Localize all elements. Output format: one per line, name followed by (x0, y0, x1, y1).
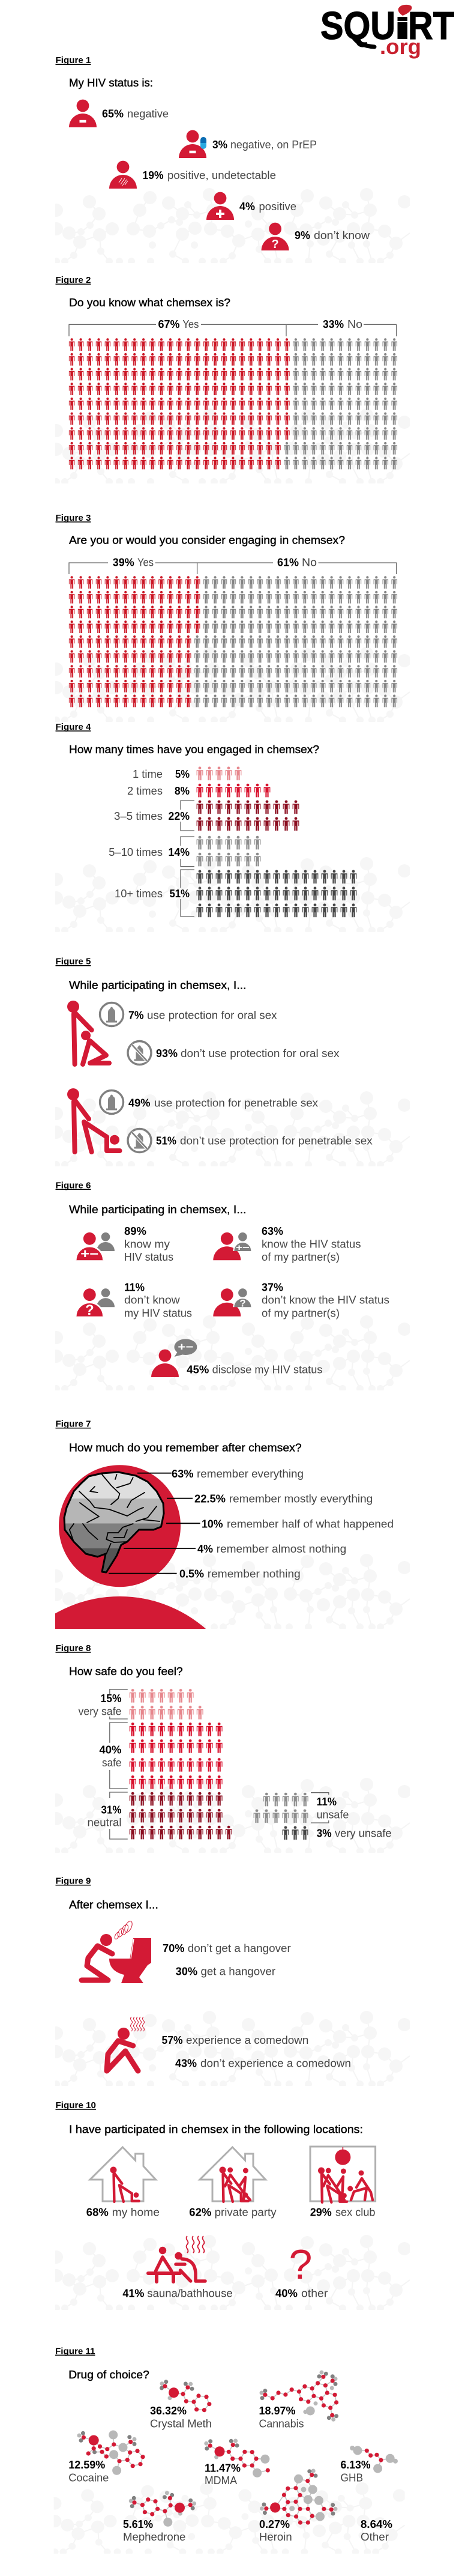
right labels: 3% (317, 1828, 332, 1840)
molecule and label: GHB: GHB (341, 2472, 363, 2484)
icon and label: positive (206, 192, 296, 220)
panel: figure 5 protection (55, 957, 410, 1165)
icon and label: other: 40% (275, 2287, 298, 2299)
molecule and label: crystal meth: 36.32% (150, 2405, 187, 2417)
molecule and label: cannabis (259, 2372, 337, 2430)
panel: figure 2 know chemsex (55, 275, 410, 482)
heading: After chemsex I... (69, 1899, 158, 1911)
icon and label: sex club: 29% (310, 2206, 332, 2218)
icon and label: disclose status: +− (178, 1341, 193, 1353)
row labels: 5–10 times (109, 846, 163, 858)
row labels: 3–5 times (114, 810, 163, 822)
molecule and label: MDMA: 11.47% (205, 2462, 241, 2474)
row labels: 2 times (127, 785, 163, 797)
left labels: neutral (88, 1817, 121, 1829)
icon and label: don't know partner status (213, 1281, 389, 1319)
comedown labels: 57% (162, 2034, 182, 2046)
icon and label: no protection oral (128, 1041, 340, 1064)
molecule and label: cocaine: 12.59% (68, 2459, 105, 2471)
panel: figure 11 drug of choice (55, 2346, 405, 2552)
icon and label: positive undetectable (109, 161, 276, 189)
right labels: unsafe (317, 1808, 349, 1820)
right labels: very unsafe (335, 1828, 392, 1840)
panel: figure 7 memory (55, 1420, 410, 1629)
panel: figure 6 HIV status knowledge (55, 1180, 410, 1389)
icon and label: know partner status: 63% (262, 1225, 283, 1237)
icon and label: don't know: don’t know (314, 229, 370, 241)
bracket and percentages: 67% (158, 318, 180, 330)
icon and label: know my status: know my (124, 1238, 170, 1250)
right labels (317, 1796, 392, 1840)
figure 8 label: Figure 8 (55, 1643, 91, 1653)
pictogram grid 39 yes 61 no (67, 575, 399, 709)
molecule and label: mephedrone: Mephedrone (123, 2531, 185, 2543)
memory labels: remember almost nothing (217, 1543, 346, 1555)
logo: SQUIRT.org: SQU (320, 4, 395, 47)
molecule and label: MDMA (205, 2441, 268, 2487)
icon and label: don't know my status: ? (85, 1302, 94, 1318)
person head circle (59, 1465, 181, 1587)
pictogram grid 67 yes 33 no (67, 338, 399, 471)
molecule and label: heroin: 0.27% (259, 2518, 290, 2530)
logo: SQUIRT.org: RT (408, 4, 454, 47)
molecule and label: heroin (259, 2471, 335, 2543)
molecule and label: mephedrone: 5.61% (123, 2518, 153, 2530)
bracket and percentages: Yes (137, 556, 154, 568)
icon and label: positive: positive (259, 201, 296, 213)
icon and label: positive undetectable: 19% (143, 169, 163, 181)
figure 2 label: Figure 2 (55, 275, 91, 285)
icon and label: don't know: 9% (295, 229, 310, 241)
icon and label: positive: 4% (239, 201, 255, 213)
bracket and percentages: 33% (323, 318, 344, 330)
comedown labels: experience a comedown (186, 2034, 308, 2046)
row labels: 5% (175, 768, 190, 780)
heading: My HIV status is: (69, 77, 153, 89)
figure 10 label: Figure 10 (55, 2100, 96, 2111)
pictogram rows (128, 1688, 310, 1843)
icon and label: private party: 62% (189, 2206, 211, 2218)
heading: While participating in chemsex, I... (69, 1204, 247, 1216)
icon and label: use protection penetrable: use protection for penetrable sex (154, 1097, 318, 1109)
icon and label: my home: 68% (86, 2206, 109, 2218)
icon and label: don't know my status: my HIV status (124, 1307, 192, 1319)
icon and label: know partner status: know the HIV status (262, 1238, 361, 1250)
icon and label: don't know my status: 11% (124, 1281, 145, 1293)
icon and label: no protection penetrable (128, 1129, 373, 1152)
memory labels: 10% (202, 1518, 223, 1530)
row labels: 1 time (133, 768, 163, 780)
icon and label: negative: 65% (102, 108, 124, 120)
icon and label: don't know my status (76, 1281, 192, 1319)
icon and label: other: other (301, 2287, 328, 2299)
bracket and percentages (69, 318, 397, 336)
icon and label: sauna (122, 2236, 233, 2299)
heading: How safe do you feel? (69, 1665, 183, 1677)
bracket and percentages: 61% (277, 556, 299, 568)
icon and label: know my status: HIV status (124, 1251, 173, 1263)
molecule and label: mephedrone (123, 2493, 194, 2543)
row labels: 8% (175, 785, 190, 797)
molecule and label: cocaine (68, 2433, 143, 2484)
molecule and label: cannabis: 18.97% (259, 2405, 295, 2417)
molecule and label: MDMA: MDMA (205, 2474, 237, 2487)
memory labels: 0.5% (179, 1568, 204, 1580)
heading: I have participated in chemsex in the following locations: (69, 2124, 363, 2136)
person body dome (55, 1596, 206, 1629)
memory labels: remember half of what happened (227, 1518, 394, 1530)
label: other drugs (361, 2518, 392, 2543)
figure 4 label: Figure 4 (55, 722, 91, 732)
bracket and percentages: No (347, 318, 362, 330)
icon and label: disclose status: disclose my HIV status (212, 1364, 322, 1376)
bracket and percentages: Yes (182, 318, 199, 330)
icon: penetrative sex figures (67, 1088, 120, 1152)
bracket and percentages: No (302, 556, 317, 568)
icon and label: negative: negative (127, 108, 169, 120)
heading: How much do you remember after chemsex? (69, 1442, 302, 1454)
label: other drugs: Other (361, 2531, 389, 2543)
left labels: safe (102, 1757, 121, 1769)
icon and label: know my status: +− (80, 1246, 98, 1261)
molecule and label: GHB (341, 2448, 395, 2484)
figure 1 label: Figure 1 (55, 55, 91, 65)
icon: oral sex figures (67, 1001, 109, 1064)
molecule and label: crystal meth (150, 2382, 212, 2430)
hangover labels: get a hangover (200, 1965, 275, 1977)
logo: SQUIRT.org (320, 4, 454, 59)
comedown labels: don’t experience a comedown (200, 2058, 351, 2070)
icon and label: don't know partner status: ? (239, 1297, 246, 1309)
icon and label: my home: my home (112, 2206, 160, 2218)
bracket and percentages: 39% (113, 556, 134, 568)
logo: SQUIRT.org: .org (380, 34, 421, 59)
hangover labels: 30% (176, 1965, 197, 1977)
figure 7 label: Figure 7 (55, 1419, 91, 1429)
row labels: 51% (169, 888, 190, 900)
icon and label: other (275, 2241, 328, 2299)
icon and label: other: ? (289, 2241, 312, 2288)
icon and label: know partner status: +− (236, 1243, 250, 1253)
icon and label: no protection oral: 93% (156, 1047, 178, 1059)
figure 5 label: Figure 5 (55, 957, 91, 967)
icon: person comedown (107, 2017, 144, 2071)
icon and label: private party: private party (215, 2206, 277, 2218)
figure 6 label: Figure 6 (55, 1180, 91, 1190)
brackets (181, 801, 194, 917)
panel: figure 9 after chemsex (55, 1876, 410, 2084)
left labels: very safe (78, 1705, 121, 1717)
brackets (110, 1690, 329, 1839)
icon and label: negative on PrEP: 3% (212, 139, 227, 151)
hangover labels (163, 1942, 291, 1977)
leader lines (109, 1473, 200, 1574)
icon and label: sauna: sauna/bathhouse (147, 2287, 233, 2299)
icon and label: positive undetectable: positive, undetectable (167, 169, 276, 181)
icon and label: use protection penetrable: 49% (128, 1097, 150, 1109)
heading: Drug of choice? (68, 2369, 149, 2381)
memory labels: remember everything (197, 1468, 304, 1480)
molecule and label: cocaine: Cocaine (68, 2472, 109, 2484)
figure 3 label: Figure 3 (55, 513, 91, 523)
heading: Do you know what chemsex is? (69, 297, 230, 309)
icon and label: disclose status: 45% (187, 1364, 209, 1376)
icon and label: sex club: sex club (335, 2206, 376, 2218)
icon: brain (64, 1472, 164, 1572)
left labels: 31% (101, 1804, 121, 1816)
icon and label: no protection oral: don’t use protection for oral sex (181, 1047, 340, 1059)
icon and label: private party (189, 2147, 277, 2218)
icon and label: know my status (76, 1225, 173, 1263)
memory labels: 63% (172, 1468, 193, 1480)
icon and label: no protection penetrable: don’t use protection for penetrable sex (180, 1135, 373, 1147)
icon and label: use protection oral: use protection for oral sex (147, 1010, 277, 1022)
icon and label: my home (86, 2147, 160, 2218)
molecule and label: GHB: 6.13% (341, 2459, 371, 2471)
right labels: 11% (317, 1796, 337, 1808)
icon: person at toilet (82, 1920, 151, 1983)
icon and label: don't know partner status: 37% (262, 1281, 283, 1293)
icon and label: negative on PrEP (179, 130, 317, 158)
icon and label: no protection penetrable: 51% (156, 1135, 176, 1147)
icon and label: don't know: ? (271, 238, 279, 251)
memory labels: remember nothing (208, 1568, 301, 1580)
row labels: 22% (168, 810, 190, 822)
icon and label: don't know (262, 223, 370, 251)
panel: figure 8 how safe (55, 1643, 410, 1851)
comedown labels: 43% (175, 2058, 197, 2070)
icon and label: use protection penetrable (100, 1091, 318, 1114)
icon and label: don't know partner status: of my partner(s) (262, 1307, 340, 1319)
bracket and percentages (69, 556, 397, 574)
icon and label: negative (69, 100, 169, 127)
left labels: 15% (101, 1693, 121, 1705)
pictogram rows (195, 766, 358, 920)
memory labels: 4% (197, 1543, 213, 1555)
panel: figure 1 HIV status (55, 55, 410, 261)
icon and label: don't know partner status: don’t know the HIV status (262, 1294, 389, 1306)
icon and label: know my status: 89% (124, 1225, 146, 1237)
row labels: 10+ times (115, 888, 163, 900)
memory labels: remember mostly everything (229, 1493, 373, 1505)
icon and label: sauna: 41% (122, 2287, 144, 2299)
hangover labels: 70% (163, 1942, 185, 1954)
figure 9 label: Figure 9 (55, 1876, 91, 1887)
icon and label: disclose status (151, 1339, 322, 1377)
panel: figure 4 how many times (55, 722, 410, 930)
panel: figure 10 locations (55, 2100, 410, 2308)
left labels (78, 1693, 121, 1829)
row labels: 14% (168, 846, 190, 858)
icon and label: know partner status: of my partner(s) (262, 1251, 340, 1263)
molecule and label: crystal meth: Crystal Meth (150, 2418, 212, 2430)
label: other drugs: 8.64% (361, 2518, 392, 2530)
panel: figure 3 consider chemsex (55, 513, 410, 720)
comedown labels (162, 2034, 351, 2070)
memory labels (172, 1468, 394, 1580)
icon and label: don't know my status: don’t know (124, 1294, 181, 1306)
left labels: 40% (100, 1744, 121, 1756)
heading: While participating in chemsex, I... (69, 980, 247, 992)
memory labels: 22.5% (194, 1493, 226, 1505)
molecule and label: cannabis: Cannabis (259, 2418, 304, 2430)
heading: Are you or would you consider engaging in chemsex? (69, 535, 345, 547)
icon and label: use protection oral: 7% (128, 1010, 144, 1022)
molecule and label: heroin: Heroin (259, 2531, 292, 2543)
hangover labels: don’t get a hangover (188, 1942, 291, 1954)
row labels (109, 768, 190, 900)
icon and label: know partner status (213, 1225, 361, 1263)
figure 11 label: Figure 11 (55, 2346, 95, 2356)
icon and label: sex club (310, 2147, 376, 2218)
heading: How many times have you engaged in chemsex? (69, 744, 319, 756)
icon and label: negative on PrEP: negative, on PrEP (230, 139, 317, 151)
icon and label: use protection oral (100, 1003, 277, 1026)
